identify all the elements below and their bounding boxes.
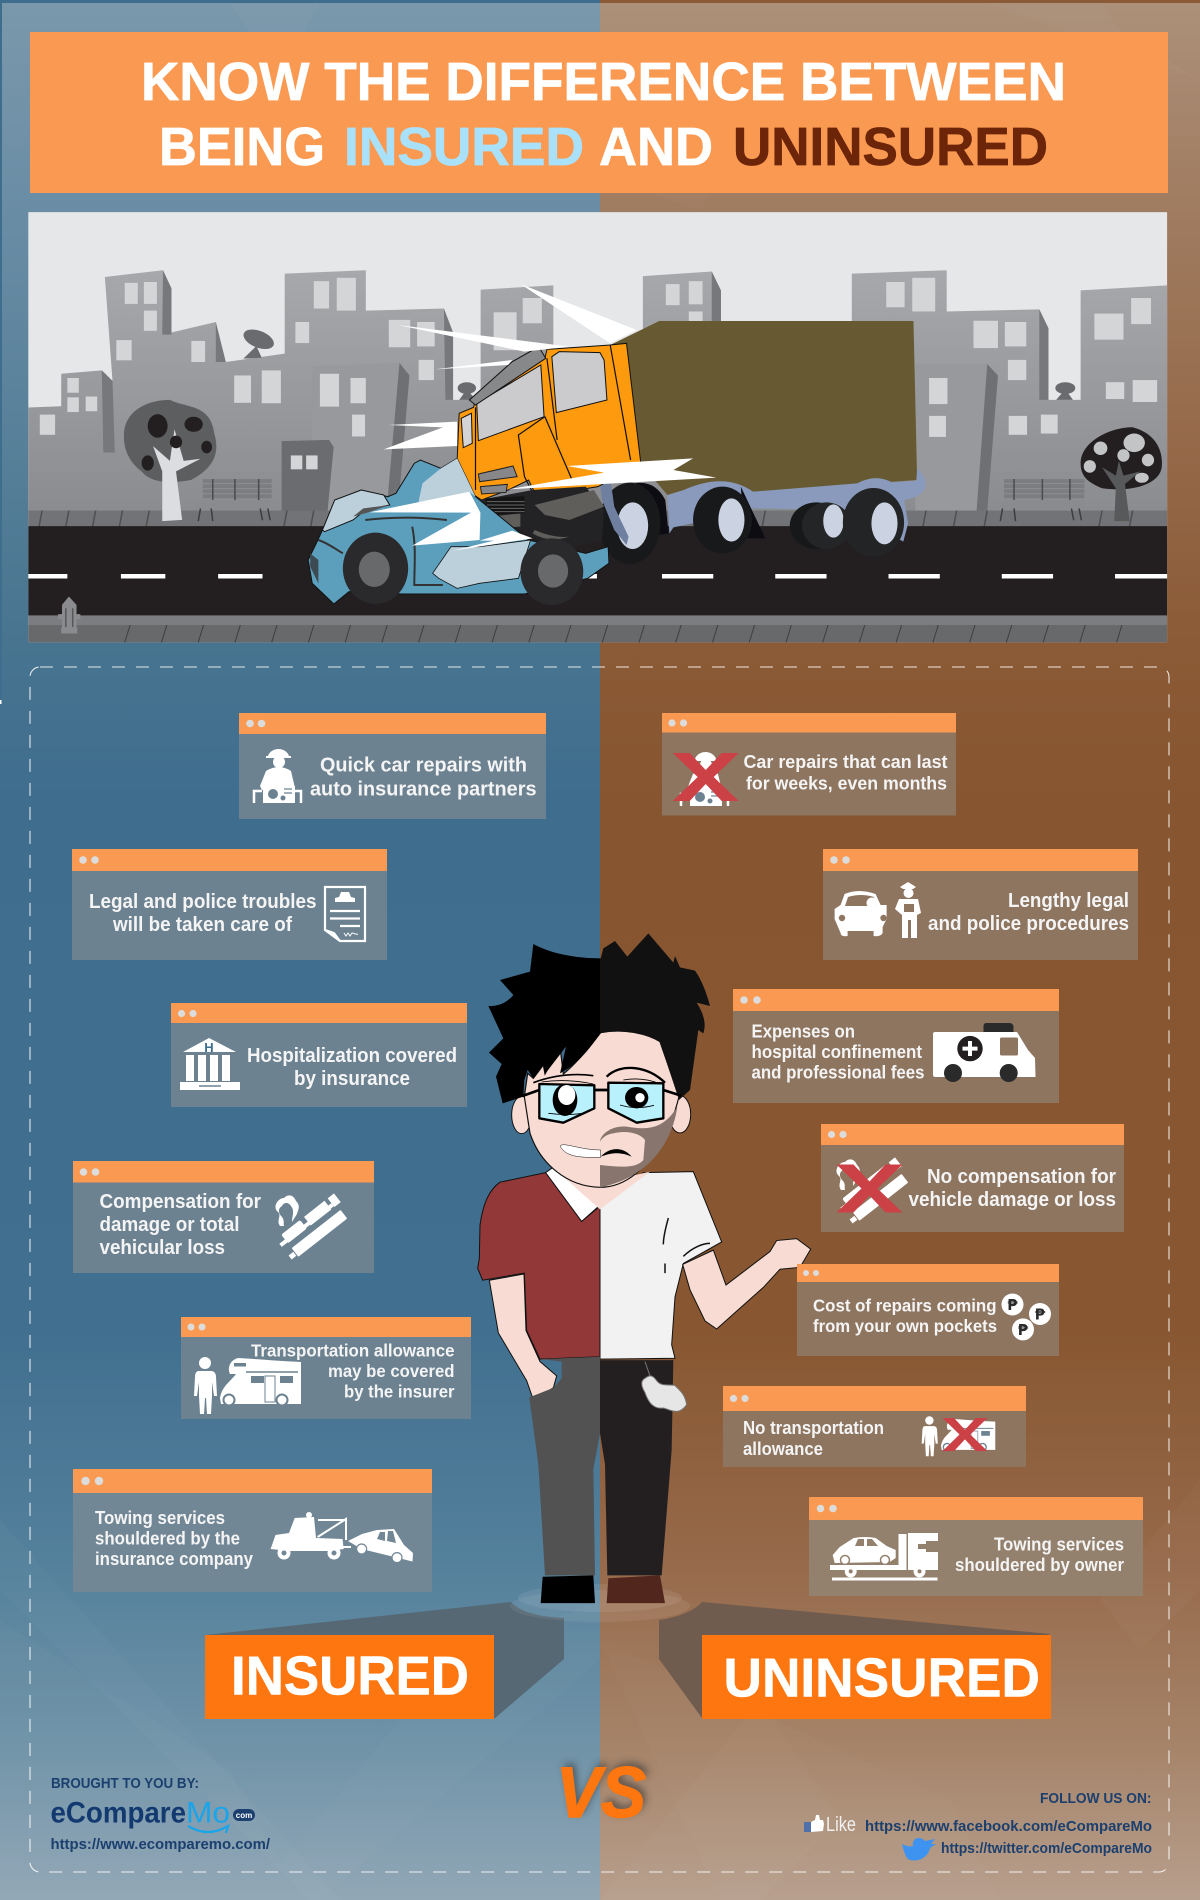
logo: eCompareMo — [50, 1796, 255, 1833]
city skyline buildings — [28, 270, 1167, 511]
glasses — [523, 1068, 681, 1123]
card: transportation allowance: may be covered — [328, 1361, 454, 1381]
ears — [512, 1096, 691, 1134]
title banner — [30, 32, 1168, 193]
road — [28, 526, 1167, 616]
icon: car and police officer — [835, 882, 921, 938]
card: quick car repairs: auto insurance partners — [310, 778, 536, 800]
icon: hospital building — [180, 1038, 240, 1090]
icon: twitter bird — [902, 1838, 936, 1860]
shirt creases — [663, 1218, 710, 1273]
card: cost of repairs — [797, 1264, 1059, 1356]
pedestal shadow: uninsured — [659, 1602, 1051, 1718]
face — [524, 1031, 679, 1187]
card: cost of repairs: Cost of repairs coming — [813, 1296, 996, 1316]
crushed blue car — [308, 458, 609, 605]
stubble beard — [600, 1107, 677, 1187]
card: car repairs last weeks — [662, 713, 956, 816]
card: lengthy legal — [823, 849, 1138, 960]
curb and lower sidewalk — [28, 615, 1167, 642]
background: insured half — [0, 0, 600, 1900]
card: transportation allowance: Transportation allowance — [251, 1340, 455, 1360]
truck — [457, 321, 926, 564]
icon: peso coins: ₱ — [1018, 1321, 1029, 1339]
card: compensation: Compensation for — [100, 1191, 261, 1213]
card: compensation — [73, 1161, 374, 1273]
card: towing insurance company: Towing services — [95, 1508, 225, 1528]
label: uninsured: UNINSURED — [724, 1646, 1040, 1708]
pedestal shadow: insured — [205, 1602, 564, 1719]
card: compensation: damage or total — [100, 1214, 240, 1236]
tree right — [1081, 427, 1162, 521]
character: half insured, half uninsured — [478, 933, 811, 1603]
title banner: AND — [599, 117, 713, 177]
vs emblem: VS — [559, 1750, 649, 1829]
dashed panel border — [30, 667, 1169, 1872]
label: insured — [205, 1635, 494, 1719]
footer: brought to you by: BROUGHT TO YOU BY: — [51, 1776, 199, 1792]
bench left — [191, 479, 272, 521]
fire hydrant — [58, 596, 80, 633]
hair right — [601, 933, 710, 1100]
card: towing insurance company: shouldered by the — [95, 1528, 240, 1548]
icon: crossed-out mechanic — [673, 752, 739, 806]
icon: ambulance — [933, 1023, 1036, 1082]
icon: peso coins — [1002, 1294, 1051, 1340]
card: hospitalization covered: by insurance — [294, 1068, 410, 1090]
card: lengthy legal: and police procedures — [928, 913, 1129, 935]
card: no transportation — [723, 1386, 1026, 1467]
background: uninsured half — [600, 0, 1200, 1900]
icon: facebook like — [804, 1815, 824, 1832]
card: quick car repairs — [239, 713, 546, 819]
card: no compensation — [821, 1124, 1124, 1232]
icon: mechanic — [254, 749, 301, 803]
icon: camper van — [220, 1358, 301, 1406]
tree left — [124, 400, 216, 521]
footer: follow us on: https://twitter.com/eCompareMo — [941, 1840, 1152, 1857]
shoes — [541, 1575, 595, 1603]
illustration: truck crashing into car on a city street — [28, 212, 1167, 642]
pants black half — [600, 1360, 673, 1575]
card: hospital expenses: hospital confinement — [752, 1042, 922, 1062]
card: no transportation: allowance — [743, 1439, 823, 1459]
title banner: BEING — [159, 117, 325, 177]
footer: follow us on — [804, 1791, 1152, 1860]
icon: wrecked car — [276, 1193, 351, 1261]
card: towing insurance company — [73, 1469, 432, 1592]
sidewalk — [28, 511, 1167, 527]
bench right — [993, 479, 1085, 521]
right arm open hand — [683, 1239, 811, 1329]
card: towing by owner: Towing services — [994, 1534, 1124, 1554]
neck — [555, 1169, 650, 1209]
footer: brought to you by: https://www.ecomparemo.com/ — [50, 1836, 271, 1853]
card: lengthy legal: Lengthy legal — [1008, 890, 1129, 912]
mouth — [560, 1145, 632, 1157]
card: no transportation: No transportation — [743, 1418, 884, 1438]
left arm in pocket — [489, 1274, 557, 1400]
card: transportation allowance: by the insurer — [344, 1382, 455, 1402]
vs emblem: VS — [556, 1754, 646, 1833]
card: no compensation: vehicle damage or loss — [908, 1189, 1116, 1211]
logo: eCompareMo: eCompare — [50, 1796, 186, 1830]
card: hospital expenses: and professional fees — [752, 1062, 924, 1082]
icon: tow truck pulling car — [271, 1512, 413, 1563]
shirt collar — [546, 1166, 600, 1221]
card: legal and police troubles: Legal and police troubles — [89, 891, 316, 913]
icon: crossed-out wreck — [836, 1157, 912, 1225]
card: towing by owner: shouldered by owner — [955, 1555, 1124, 1575]
icon: person — [194, 1357, 217, 1414]
card: hospitalization covered — [171, 1003, 467, 1107]
footer: follow us on: Like — [826, 1814, 856, 1836]
card: car repairs last weeks: for weeks, even months — [746, 772, 947, 794]
head — [488, 933, 710, 1209]
card: towing insurance company: insurance company — [95, 1549, 253, 1569]
card: hospitalization covered: Hospitalization covered — [247, 1045, 457, 1067]
title banner: INSURED — [344, 117, 584, 177]
icon: peso coins: ₱ — [1035, 1306, 1046, 1324]
label: insured: INSURED — [231, 1644, 469, 1706]
hair left — [488, 944, 601, 1103]
card: no compensation: No compensation for — [927, 1166, 1116, 1188]
logo: eCompareMo: Mo — [186, 1796, 230, 1830]
card: car repairs last weeks: Car repairs that can last — [744, 751, 948, 772]
card: towing by owner — [809, 1497, 1143, 1596]
pocket lining — [642, 1362, 687, 1411]
icon: person and crossed-out van — [922, 1416, 995, 1456]
icon: hospital building: H — [204, 1040, 214, 1055]
logo: eCompareMo: com — [236, 1811, 252, 1820]
white impact sparks — [369, 284, 716, 551]
pedestal base — [510, 1584, 690, 1622]
shirt red half — [478, 1173, 600, 1359]
footer: follow us on: https://www.facebook.com/eCompareMo — [865, 1818, 1152, 1835]
card: cost of repairs: from your own pockets — [813, 1316, 997, 1336]
pants grey half — [529, 1357, 600, 1575]
icon: document — [325, 887, 365, 941]
icon: peso coins: ₱ — [1007, 1296, 1018, 1314]
card: transportation allowance — [181, 1317, 471, 1419]
card: quick car repairs: Quick car repairs with — [320, 754, 527, 776]
shirt white half — [600, 1172, 722, 1359]
title banner: UNINSURED — [733, 117, 1048, 177]
title banner: KNOW THE DIFFERENCE BETWEEN — [141, 52, 1066, 112]
card: legal and police troubles — [72, 849, 387, 960]
card: compensation: vehicular loss — [100, 1237, 225, 1259]
footer: follow us on: FOLLOW US ON: — [1040, 1791, 1152, 1807]
label: uninsured — [702, 1635, 1051, 1719]
icon: flatbed truck carrying car — [830, 1533, 938, 1580]
card: hospital expenses: Expenses on — [752, 1022, 855, 1042]
card: hospital expenses — [733, 989, 1059, 1103]
footer: brought to you by — [50, 1776, 271, 1853]
card: legal and police troubles: will be taken care of — [112, 914, 292, 936]
